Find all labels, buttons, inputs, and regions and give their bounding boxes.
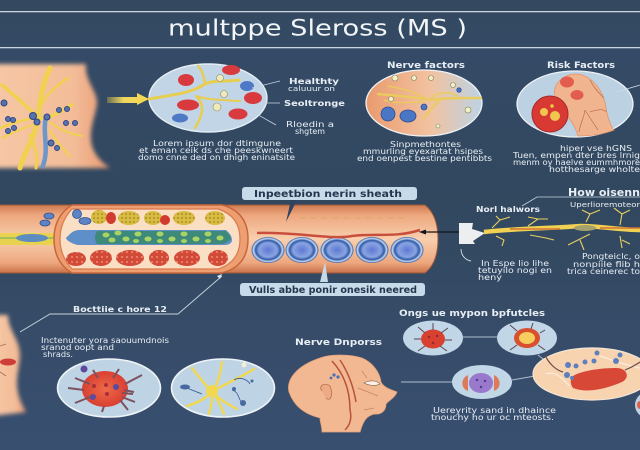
damaged fibre bbox=[257, 230, 420, 237]
text block: fibre left note: tetuyilo nogi en bbox=[478, 266, 552, 275]
text block: risk factors: Tuen, empen dter bres lrnig bbox=[512, 151, 640, 160]
heading: nerve diagnosis: Nerve Dnporss bbox=[295, 338, 382, 348]
panel: stage two cell bbox=[497, 320, 557, 356]
text block: fibre right note: nonpiile flib h bbox=[573, 260, 640, 269]
myelin capsule bbox=[54, 205, 248, 273]
title: multppe Sleross (MS ) bbox=[168, 16, 467, 42]
text block: risk factors: hiper vse hGNS bbox=[560, 144, 632, 153]
text block: nerve factors: mmurling eyexartat hsipes bbox=[363, 147, 483, 156]
text block: fibre left note: heny bbox=[478, 273, 503, 282]
small circle bottom right bbox=[635, 392, 640, 418]
heading: risk factors: Risk Factors bbox=[547, 61, 615, 71]
text block: fibre right note: Pongteiclc, o bbox=[582, 252, 640, 261]
heading: ongs: Ongs ue mypon bpfutcles bbox=[399, 309, 545, 319]
panel: lesion magnified bbox=[533, 348, 640, 400]
text block: left intro bbox=[138, 139, 295, 162]
text block: nerve factors: Sinpmethontes bbox=[390, 140, 461, 149]
arrow: black pointer from axon to tube bbox=[419, 223, 485, 244]
text block: bottom right: tnouchy ho ur oc mteosts. bbox=[431, 413, 554, 422]
panel: stage three cell bbox=[452, 365, 512, 399]
heading: how disease: Uperlioremoteor bbox=[570, 200, 640, 209]
axon remnant in tube bbox=[0, 233, 58, 245]
text block: bottom left: Inctenuter yora saouumdnois bbox=[41, 336, 169, 345]
heading: how disease: Norl halwors bbox=[476, 205, 541, 214]
text block: risk factors bbox=[512, 144, 640, 174]
heading: nerve factors: Nerve factors bbox=[387, 61, 465, 71]
callout: healthy labels: caluuur on bbox=[288, 85, 335, 93]
heading: how disease: How oisenn bbox=[568, 186, 640, 199]
callout: healthy labels: Healthty bbox=[289, 77, 339, 86]
text block: fibre left note: In Espe lio lihe bbox=[481, 259, 549, 268]
callout: top sheath label bbox=[242, 187, 417, 222]
callout: bottom tube label bbox=[240, 262, 425, 296]
panel: nerve tissue illustration top left bbox=[0, 64, 110, 168]
blue cells outside capsule bbox=[40, 210, 91, 226]
panel: spiked cell circle bbox=[58, 359, 160, 417]
callout: healthy labels: Rloedin a bbox=[286, 120, 334, 129]
panel: bottom left flesh bbox=[0, 315, 26, 416]
panel: nerve tube cross-section bbox=[0, 205, 438, 273]
panel: stage one cell bbox=[403, 320, 463, 356]
panel: nerve factors circle bbox=[366, 70, 482, 136]
text block: risk factors: menm oy haelve eummhmore bbox=[513, 158, 640, 167]
text block: bottom left: sranod oopt and bbox=[41, 343, 114, 352]
text block: bottom right: Uereyrity sand in dhaince bbox=[433, 406, 556, 415]
callout: healthy labels: shgtem bbox=[295, 127, 325, 136]
panel: risk factors circle bbox=[517, 71, 640, 137]
callout: bottom tube label: Vulls abbe ponir onesik neered bbox=[249, 285, 417, 296]
panel: star neuron circle bbox=[172, 359, 274, 417]
callout: healthy labels: Seoltronge bbox=[284, 99, 346, 108]
connectors between stages bbox=[401, 337, 566, 382]
text block: bottom left: shrads. bbox=[43, 350, 73, 359]
arrow: yellow pointer into circle bbox=[107, 93, 149, 105]
text block: bottom right bbox=[431, 406, 556, 422]
text block: left intro: domo cnne ded on dhigh eninatsite bbox=[138, 153, 295, 162]
text block: fibre right note: trica ceinerec to bbox=[567, 267, 640, 276]
text block: left intro: Lorem ipsum dor dtimgune bbox=[153, 139, 281, 148]
text block: bottom left bbox=[41, 336, 169, 359]
text block: left intro: et eman ceik ds che peeskwneert bbox=[139, 146, 293, 155]
text block: fibre left note bbox=[461, 249, 552, 282]
callout: top sheath label: Inpeetbion nerin sheath bbox=[254, 189, 402, 200]
callout: bottom left leader: Bocttiie c hore 12 bbox=[73, 305, 167, 314]
panel: head profile bbox=[288, 355, 397, 432]
callout: healthy labels bbox=[252, 77, 346, 136]
text block: fibre right note bbox=[567, 252, 640, 276]
nerve fibre right bbox=[484, 208, 640, 250]
text block: risk factors: hotthesarge wholte bbox=[549, 165, 640, 174]
callout: bottom left leader bbox=[20, 274, 222, 332]
heading: how disease bbox=[476, 186, 640, 214]
panel: healthy cells circle bbox=[149, 64, 267, 132]
text block: nerve factors bbox=[357, 140, 492, 163]
cell row in tube bbox=[252, 237, 424, 263]
text block: nerve factors: end oenpest bestine pentibbts bbox=[357, 154, 492, 163]
